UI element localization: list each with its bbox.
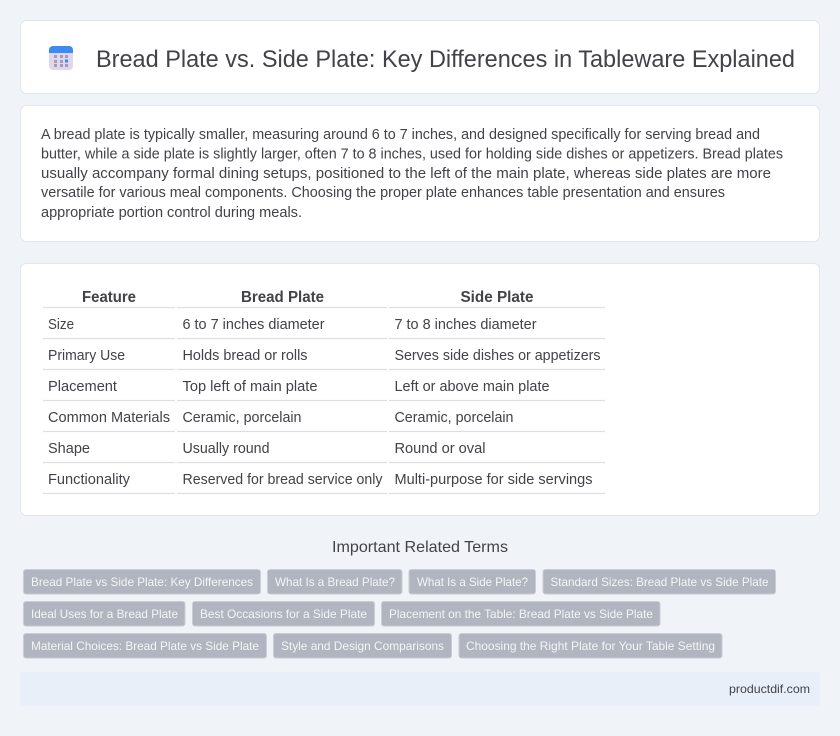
row: common materials	[48, 410, 514, 426]
related term tags: Bread Plate vs Side Plate: Key Differences	[31, 575, 253, 589]
row: common materials: Ceramic, porcelain	[394, 410, 514, 426]
row: common materials: Ceramic, porcelain	[182, 410, 302, 426]
footer source: productdif.com	[729, 682, 810, 696]
heading: related terms: Important Related Terms	[332, 539, 508, 556]
panel: comparison table	[20, 264, 820, 516]
related term tags: Choosing the Right Plate for Your Table Setting	[466, 639, 715, 653]
row: shape	[48, 441, 486, 457]
row: functionality: Functionality	[48, 472, 131, 488]
table header: Feature	[82, 289, 136, 306]
description text: A bread plate is typically smaller, measuring around 6 to 7 inches, and designed specifically for serving bread and	[41, 127, 760, 143]
related term tags: Material Choices: Bread Plate vs Side Plate	[31, 639, 259, 653]
row: placement: Placement	[48, 379, 117, 395]
row: common materials: Common Materials	[48, 410, 170, 426]
table rows	[48, 317, 600, 488]
row: functionality	[48, 472, 592, 488]
row: primary use: Primary Use	[48, 348, 125, 364]
panel: description	[20, 106, 820, 242]
row: shape: Shape	[48, 441, 90, 457]
row: shape: Usually round	[182, 441, 270, 457]
related term tags	[24, 570, 776, 658]
table header: Side Plate	[460, 289, 534, 306]
title: Bread Plate vs. Side Plate: Key Differences in Tableware Explained	[96, 46, 795, 73]
row: functionality: Multi-purpose for side servings	[394, 472, 592, 488]
related term tags: Standard Sizes: Bread Plate vs Side Plate	[550, 575, 769, 589]
related term tags: Style and Design Comparisons	[281, 639, 444, 653]
description text: appropriate portion control during meals.	[41, 205, 302, 221]
footer bar	[20, 672, 820, 706]
row: placement	[48, 379, 550, 395]
row: placement: Top left of main plate	[182, 379, 318, 395]
description text: butter, while a side plate is slightly larger, often 7 to 8 inches, used for holding side dishes or appetizers. Bread plates	[41, 146, 783, 162]
row: primary use: Holds bread or rolls	[182, 348, 308, 364]
row: shape: Round or oval	[394, 441, 486, 457]
table header: Bread Plate	[241, 289, 324, 306]
row: size: 6 to 7 inches diameter	[182, 317, 325, 333]
related term tags: What Is a Side Plate?	[417, 575, 528, 589]
row: primary use	[48, 348, 600, 364]
related term tags: What Is a Bread Plate?	[275, 575, 395, 589]
description text: usually accompany formal dining setups, positioned to the left of the main plate, whereas side plates are more	[41, 166, 771, 182]
description text: versatile for various meal components. Choosing the proper plate enhances table presentation and ensures	[41, 185, 725, 201]
row: functionality: Reserved for bread service only	[182, 472, 383, 488]
header panel	[20, 20, 820, 94]
icon: calendar	[49, 46, 73, 70]
related term tags: Ideal Uses for a Bread Plate	[31, 607, 178, 621]
row: size: Size	[48, 317, 74, 333]
row: placement: Left or above main plate	[394, 379, 550, 395]
table header	[82, 289, 534, 306]
row: size	[48, 317, 537, 333]
related term tags: Best Occasions for a Side Plate	[200, 607, 367, 621]
related term tags: Placement on the Table: Bread Plate vs Side Plate	[389, 607, 653, 621]
description text	[41, 127, 783, 221]
row: size: 7 to 8 inches diameter	[394, 317, 537, 333]
row: primary use: Serves side dishes or appetizers	[394, 348, 600, 364]
